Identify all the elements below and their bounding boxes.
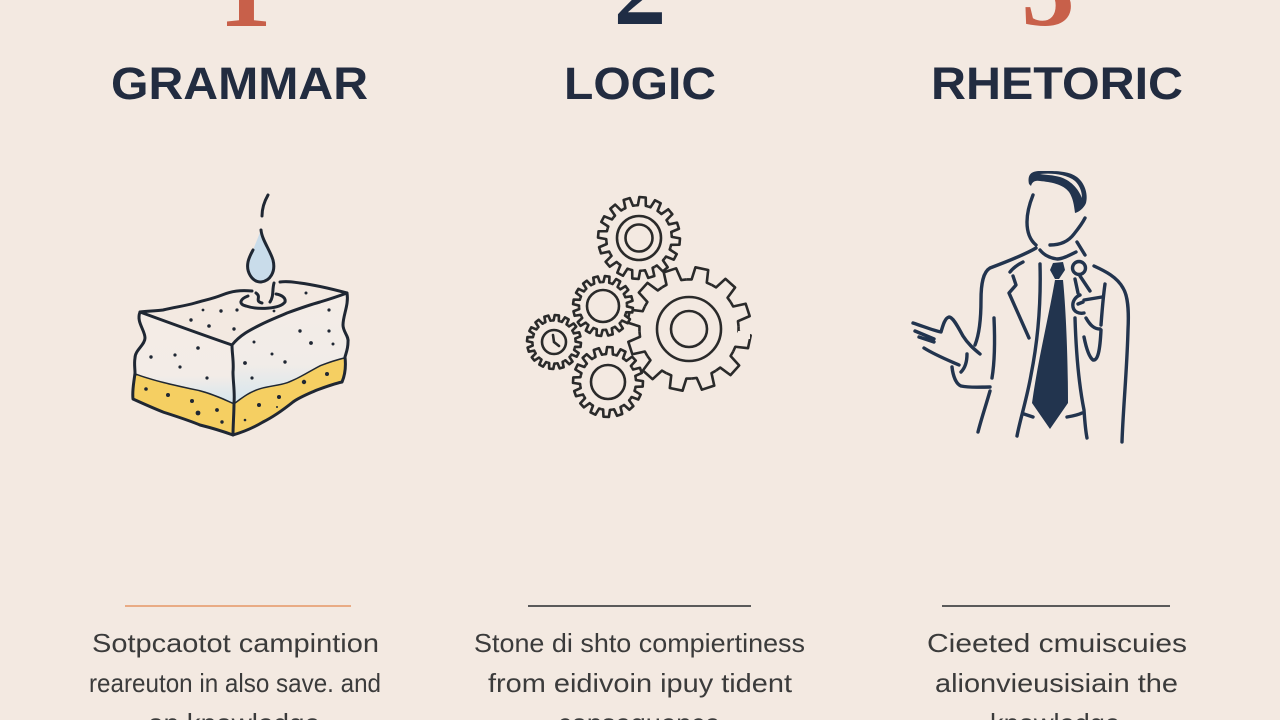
microphone and raised hand [1072,262,1105,360]
right lapel line [1075,318,1087,438]
heading: rhetoric: RHETORIC [931,58,1183,109]
face [1027,195,1036,245]
gesturing left hand and sleeve [913,317,995,432]
description: grammar [89,628,381,720]
ripple [241,283,285,308]
tie knot [1050,262,1065,279]
collar and shoulders [975,248,1036,345]
bottom gear [571,345,645,419]
large gear [616,256,762,402]
middle gear [569,272,637,340]
divider: rhetoric [942,605,1170,607]
water drop [248,230,274,282]
description: grammar: reareuton in also save. and [89,668,381,698]
panel: grammar [89,0,381,720]
description: logic: from eidivoin ipuy tident [488,668,793,698]
small clock gear [524,312,584,372]
shirt hem [1024,413,1082,417]
panel: logic [474,0,805,720]
divider: grammar [125,605,351,607]
icon: interlocking gears [524,194,762,419]
description: grammar: Sotpcaotot campintion [92,628,379,658]
heading: logic: LOGIC [564,58,716,109]
heading: grammar: GRAMMAR [111,58,368,109]
description: rhetoric: Cieeted cmuiscuies [927,628,1187,658]
divider: logic [528,605,751,607]
top gear [595,194,683,282]
description: rhetoric [927,628,1187,720]
description: logic [474,628,805,720]
description: logic: Stone di shto compiertiness [474,628,805,658]
sponge pores [144,292,334,424]
hair [1029,171,1087,213]
icon: sponge with water drop [133,195,348,435]
icon: speaker in suit [913,171,1128,442]
tie [1032,280,1068,429]
description: rhetoric: alionvieusisiain the [935,668,1178,698]
panel: rhetoric [913,0,1187,720]
